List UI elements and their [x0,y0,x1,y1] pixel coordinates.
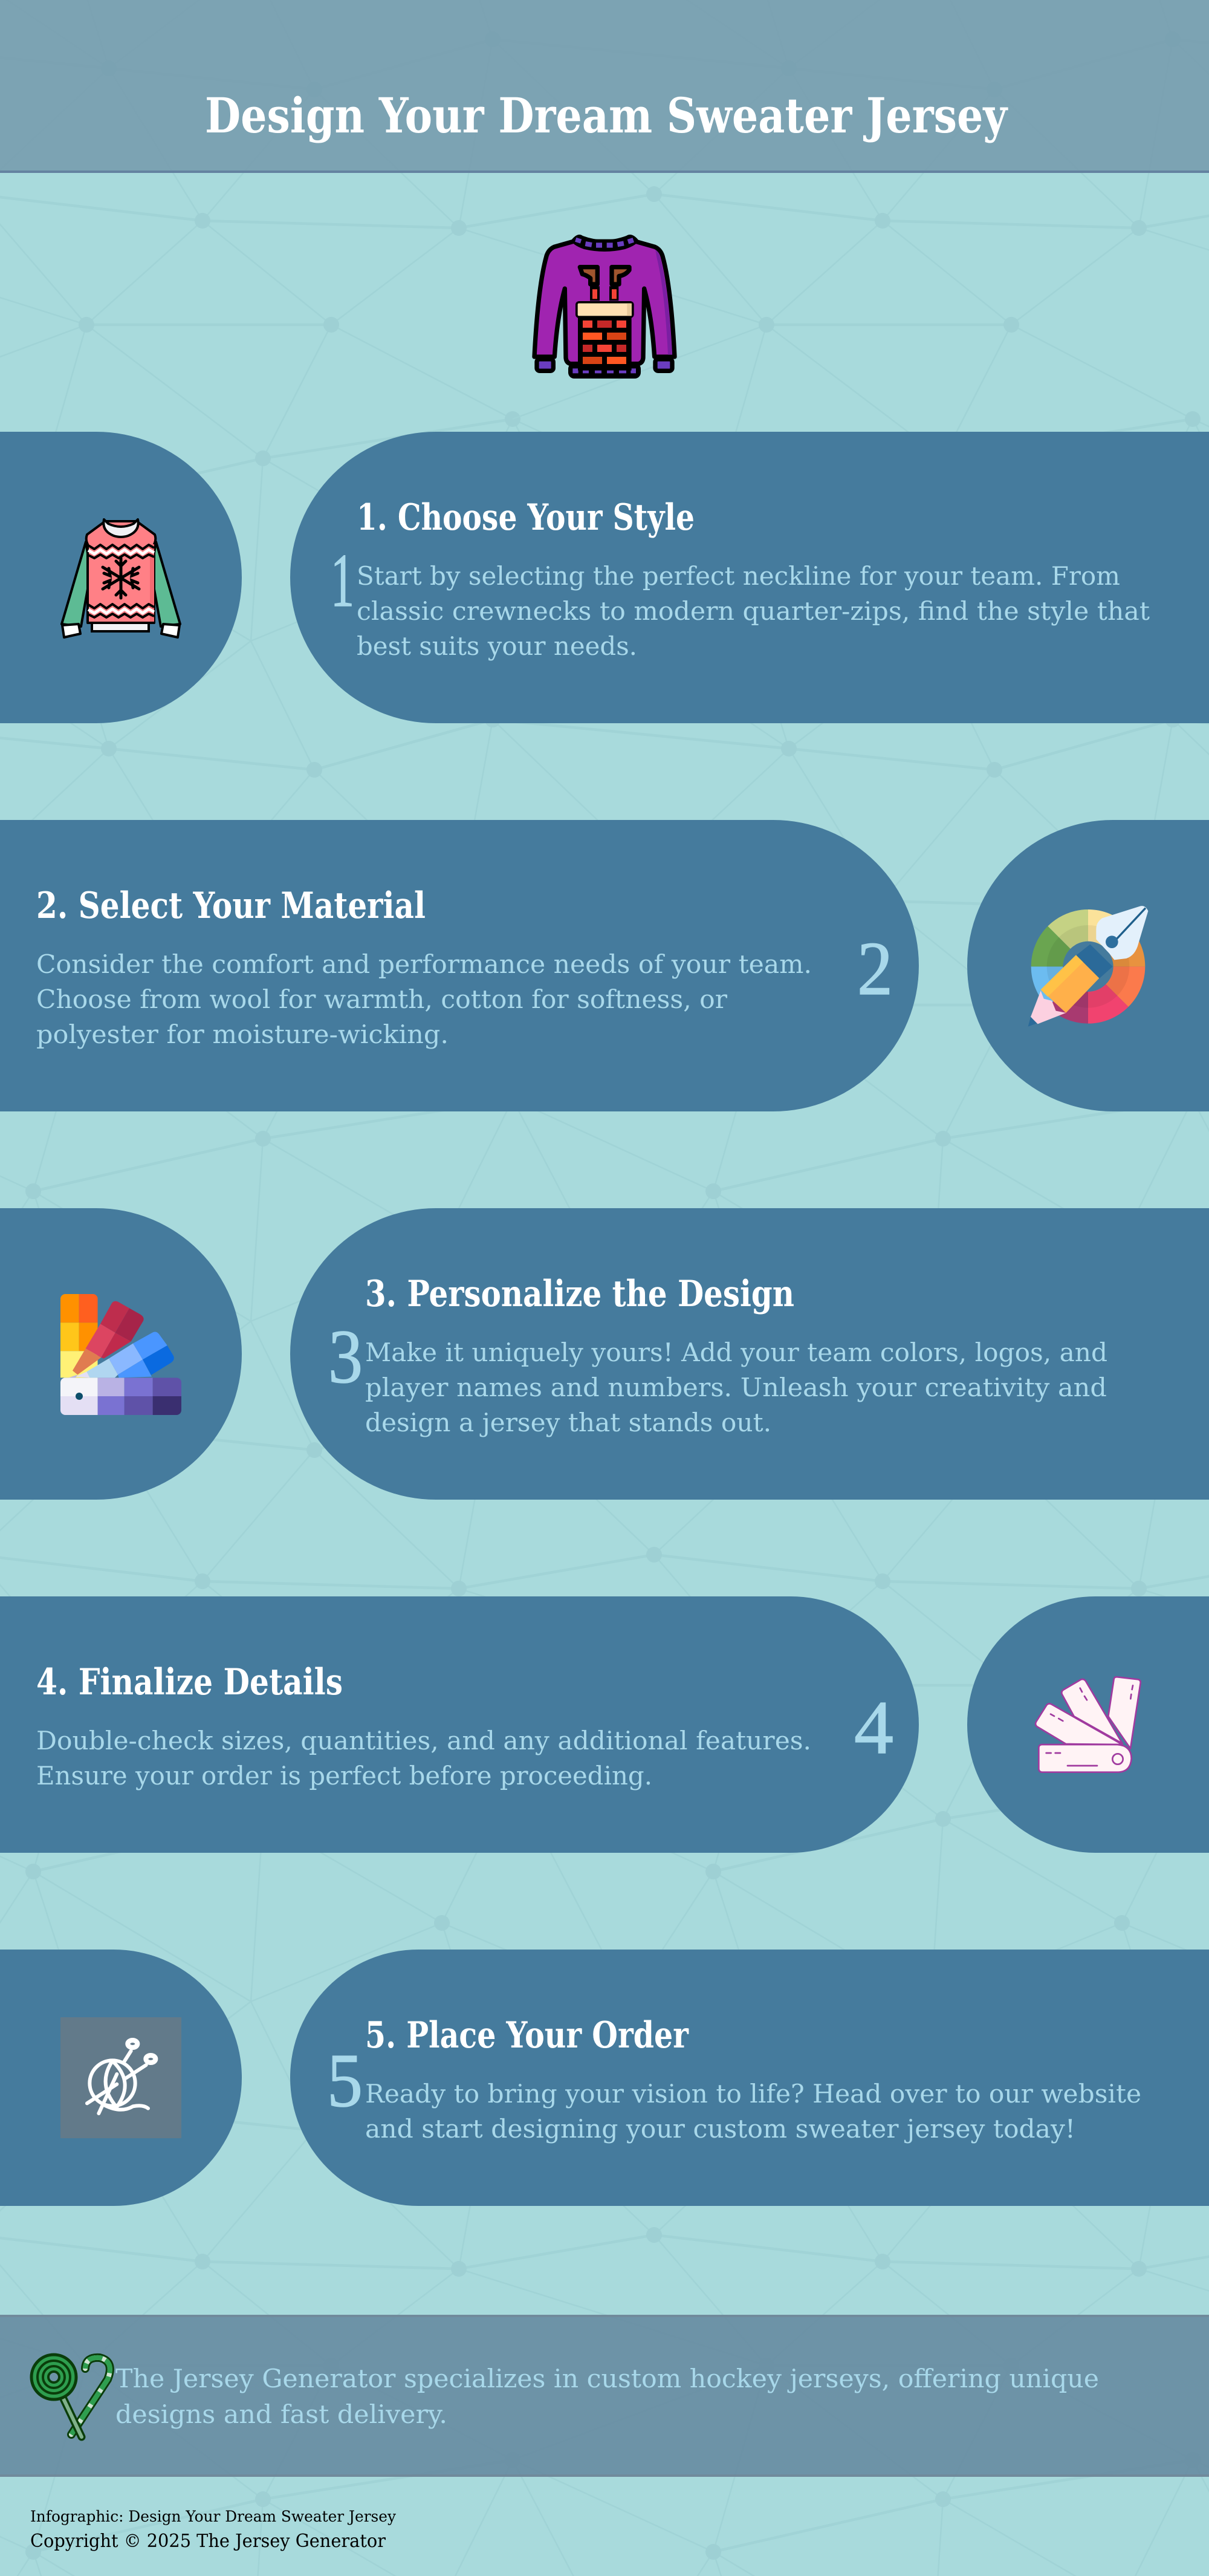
content panel: step 4 [0,1596,919,1853]
step text 3: Make it uniquely yours! Add your team colors, logos, and [365,1338,1107,1367]
content panel: step 1 [290,432,1209,723]
step number 1: 1 [331,539,354,623]
step text 1: Start by selecting the perfect neckline for your team. From [357,561,1120,591]
step text 3: design a jersey that stands out. [365,1408,771,1437]
footer band [0,2315,1209,2477]
panel: step 1 [0,432,1209,723]
step text 4: Double-check sizes, quantities, and any additional features. [36,1726,811,1755]
icon: colour wheel with pencil and pen nib [1028,906,1148,1027]
panel: step 4 [0,1596,1209,1853]
icon: yarn ball with knitting needles [60,2017,181,2138]
title: Design Your Dream Sweater Jersey [205,87,1008,144]
header band with title [0,0,1209,173]
icon: fabric sample fan [1036,1677,1141,1772]
icon panel: step 5 [0,1950,242,2206]
step text 4 [36,1726,811,1791]
step text 2 [36,949,812,1049]
icon panel: step 1 [0,432,242,723]
step text 5 [365,2079,1141,2144]
step number 4: 4 [854,1686,893,1770]
step text 4: Ensure your order is perfect before proceeding. [36,1761,652,1791]
step heading 1: 1. Choose Your Style [357,496,695,539]
step heading 5: 5. Place Your Order [365,2014,689,2057]
icon panel: step 2 [967,820,1209,1111]
footer text: The Jersey Generator specializes in custom hockey jerseys, offering unique [115,2364,1099,2393]
icon: green lollipop and candy cane [31,2355,110,2437]
content panel: step 2 [0,820,919,1111]
credits: Infographic: Design Your Dream Sweater Jersey [30,2508,397,2525]
step text 5: Ready to bring your vision to life? Head over to our website [365,2079,1141,2109]
step text 3 [365,1338,1107,1437]
step heading 3: 3. Personalize the Design [365,1273,794,1315]
panel: step 3 [0,1208,1209,1500]
step text 1 [357,561,1150,661]
step heading 4: 4. Finalize Details [36,1661,343,1703]
step heading 2: 2. Select Your Material [36,885,426,927]
footer text [115,2364,1099,2429]
icon: pink snowflake sweater [62,519,180,637]
panel: step 2 [0,820,1209,1111]
credits [30,2508,397,2552]
step text 2: Choose from wool for warmth, cotton for softness, or [36,984,728,1014]
step text 5: and start designing your custom sweater jersey today! [365,2114,1075,2144]
step number 2: 2 [857,927,893,1011]
credits: Copyright © 2025 The Jersey Generator [30,2531,386,2552]
icon: purple sweater with chimney [534,235,675,379]
content panel: step 5 [290,1950,1209,2206]
icon panel: step 4 [967,1596,1209,1853]
step text 2: polyester for moisture-wicking. [36,1020,449,1049]
step text 2: Consider the comfort and performance needs of your team. [36,949,812,979]
icon: colour swatch fan [60,1294,181,1415]
icon panel: step 3 [0,1208,242,1500]
step text 3: player names and numbers. Unleash your creativity and [365,1373,1107,1402]
step text 1: classic crewnecks to modern quarter-zips, find the style that [357,596,1150,626]
panel: step 5 [0,1950,1209,2206]
step text 1: best suits your needs. [357,631,637,661]
step number 3: 3 [328,1315,363,1399]
content panel: step 3 [290,1208,1209,1500]
footer text: designs and fast delivery. [115,2399,447,2429]
step number 5: 5 [327,2039,363,2123]
